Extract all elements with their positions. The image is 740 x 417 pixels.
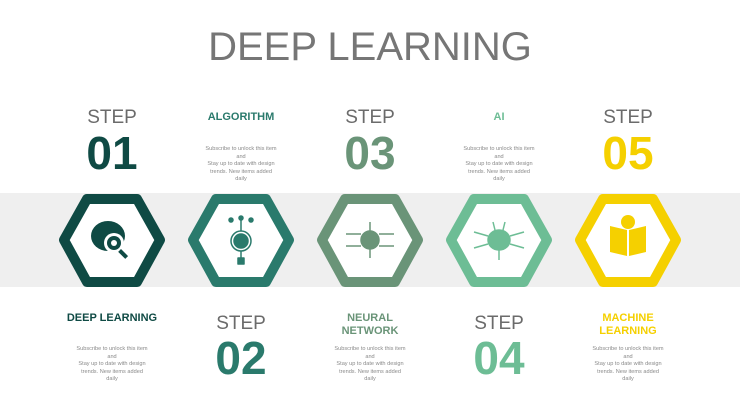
AI label: AI [494,111,504,123]
step 05 block: 05 [602,127,654,179]
icon: algorithm gear [229,216,253,264]
algorithm label: Subscribe to unlock this item and [205,146,277,160]
AI label [463,111,535,182]
step 02 block: 02 [215,332,267,384]
hexagon 2 [193,199,289,282]
deep learning label [67,312,157,382]
neural network label: NETWORK [342,325,398,337]
algorithm label [205,111,277,182]
icon: book with brain [610,215,646,256]
step 01 block: 01 [86,127,138,179]
background band [0,193,740,287]
hexagon 1 [64,199,160,282]
step 03 block: 03 [344,127,396,179]
hexagons row [59,194,681,287]
neural network label [334,312,406,382]
deep learning label: Subscribe to unlock this item and [76,346,148,360]
neural network label: Subscribe to unlock this item and [334,346,406,360]
algorithm label: Stay up to date with design trends. New items added daily [207,161,275,182]
machine learning label [592,312,664,382]
algorithm label: ALGORITHM [208,111,274,123]
deep learning label: DEEP LEARNING [67,312,157,324]
icon: neural brain [346,222,394,258]
machine learning label: Subscribe to unlock this item and [592,346,664,360]
title: DEEP LEARNING [208,25,532,69]
step 01 block: STEP [87,107,137,128]
step 02 block: STEP [216,313,266,334]
hexagon 3 [322,199,418,282]
step 04 block: 04 [473,332,525,384]
neural network label: NEURAL [347,312,393,324]
hexagon 4 [451,199,547,282]
AI label: Stay up to date with design trends. New items added daily [465,161,533,182]
hexagon 5 [580,199,676,282]
deep learning label: Stay up to date with design trends. New items added daily [78,361,146,382]
step 05 block: STEP [603,107,653,128]
machine learning label: LEARNING [599,325,657,337]
AI label: Subscribe to unlock this item and [463,146,535,160]
neural network label: Stay up to date with design trends. New items added daily [336,361,404,382]
step 04 block: STEP [474,313,524,334]
icon: AI brain circuit [474,222,524,260]
step 03 block: STEP [345,107,395,128]
machine learning label: MACHINE [602,312,654,324]
icon: brain with magnifier [91,221,128,259]
machine learning label: Stay up to date with design trends. New items added daily [594,361,662,382]
